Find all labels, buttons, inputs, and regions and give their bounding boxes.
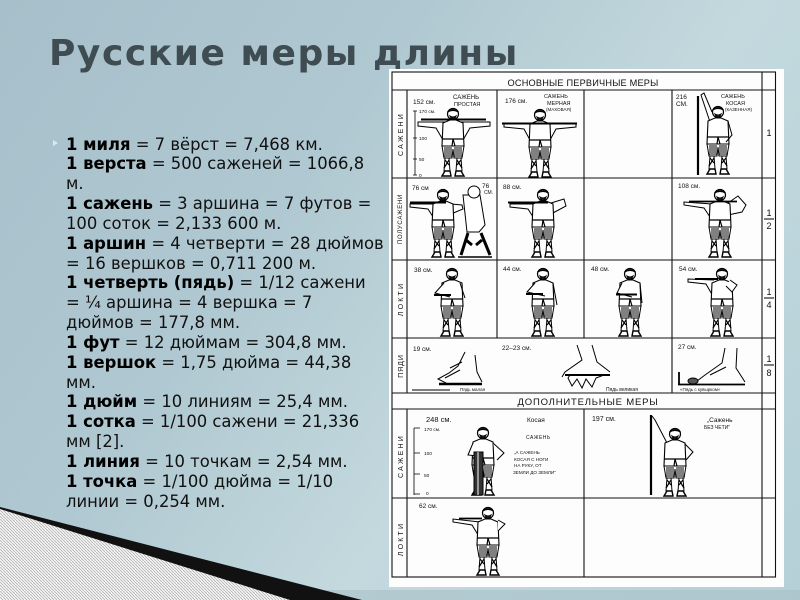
- text block: length equivalences: 1 верста = 500 саженей = 1066,8: [66, 154, 364, 173]
- chart: table of measures: 50: [419, 157, 425, 163]
- height scales: [413, 111, 420, 495]
- figure: half sazhen, oblique: [684, 190, 746, 257]
- text block: length equivalences: 1 точка = 1/100 дюйма = 1/10: [66, 472, 333, 491]
- measure labels: САЖЕНЬ: [453, 95, 479, 101]
- measure labels: СМ.: [484, 190, 493, 196]
- measure labels: 38 см.: [414, 267, 433, 274]
- text block: length equivalences: 1 аршин = 4 четверти = 28 дюймов: [66, 234, 384, 253]
- measure labels: 76: [482, 183, 490, 190]
- figure: half sazhen, front and side: [410, 186, 492, 257]
- measure labels: КОСАЯ: [726, 101, 745, 107]
- chart: table of measures: 100: [424, 451, 432, 457]
- figure: extra elbow: [453, 508, 505, 575]
- additional labels: БЕЗ ЧЕТИ": [704, 425, 730, 431]
- measure labels: Пядь великая: [606, 387, 638, 393]
- fractions column: [764, 128, 774, 378]
- text block: length equivalences: 1 дюйм = 10 линиям = 25,4 мм.: [66, 392, 348, 411]
- fractions column: 8: [766, 368, 772, 378]
- fractions column: 1: [766, 128, 772, 138]
- additional labels: 248 см.: [426, 415, 452, 424]
- additional labels: САЖЕНЬ: [526, 435, 551, 441]
- figure: oblique sazhen with ruler: [468, 428, 504, 495]
- measure labels: 44 см.: [503, 266, 522, 273]
- measure labels: 176 см.: [505, 98, 527, 105]
- text block: length equivalences: мм [2].: [66, 432, 124, 451]
- text block: length equivalences: = ¼ аршина = 4 вершка = 7: [66, 293, 312, 312]
- measure labels: 108 см.: [678, 183, 700, 190]
- measure labels: 152 см.: [413, 99, 435, 106]
- additional labels: „Сажень: [707, 417, 733, 424]
- additional labels: НА РУКУ, ОТ: [514, 463, 542, 468]
- measure labels: (МАХОВАЯ): [546, 107, 572, 112]
- chart: table of measures: 0: [419, 173, 422, 179]
- row labels: [398, 112, 405, 556]
- additional labels: 62 см.: [419, 503, 438, 510]
- text block: length equivalences: 1 четверть (пядь) = 1/12 сажени: [66, 273, 366, 292]
- heading: additional measures: ДОПОЛНИТЕЛЬНЫЕ МЕРЫ: [518, 397, 658, 408]
- measure labels: 76 см: [412, 185, 429, 192]
- fractions column: 1: [766, 354, 772, 364]
- text block: length equivalences: линии = 0,254 мм.: [66, 492, 225, 511]
- figure: oblique sazhen: [698, 93, 732, 175]
- measure labels: 27 см.: [678, 344, 697, 351]
- row labels: САЖЕНИ: [398, 112, 405, 156]
- row labels: ЛОКТИ: [398, 282, 405, 316]
- additional labels: Косая: [527, 417, 545, 424]
- measure labels: Пядь малая: [460, 387, 486, 392]
- measure labels: (КАЗЕННАЯ): [725, 107, 753, 112]
- fractions column: 1: [766, 287, 772, 297]
- measure labels: ПРОСТАЯ: [454, 102, 480, 108]
- measure labels: САЖЕНЬ: [721, 94, 745, 100]
- measure labels: САЖЕНЬ: [544, 94, 568, 100]
- measure labels: МЕРНАЯ: [547, 101, 571, 107]
- text block: length equivalences: 1 сажень = 3 аршина = 7 футов =: [66, 194, 371, 213]
- white chart panel: [389, 69, 784, 587]
- measure labels: СМ.: [676, 101, 688, 108]
- fractions column: 2: [766, 221, 772, 231]
- text block: length equivalences: 100 соток = 2,133 600 м.: [66, 214, 281, 233]
- measure labels: 88 см.: [503, 184, 522, 191]
- text block: length equivalences: [66, 134, 384, 511]
- measure labels: 22–23 см.: [502, 345, 532, 352]
- text block: length equivalences: 1 фут = 12 дюймам = 304,8 мм.: [66, 333, 347, 352]
- heading: primary measures: ОСНОВНЫЕ ПЕРВИЧНЫЕ МЕРЫ: [508, 78, 658, 88]
- icon: span with somersault: [678, 348, 745, 384]
- figure: sazhen without a quarter: [651, 415, 693, 496]
- measure labels: «Пядь с кувырком»: [680, 387, 721, 392]
- figure: measured sazhen: [502, 110, 577, 177]
- row labels: ПОЛУСАЖЕНИ: [398, 194, 404, 244]
- row labels: ЛОКТИ: [398, 522, 405, 556]
- additional labels: „А САЖЕНЬ: [514, 450, 540, 455]
- fractions column: 1: [766, 208, 772, 218]
- chart: table of measures: 100: [419, 136, 427, 142]
- chart: table of measures: 170 см.: [424, 427, 440, 433]
- additional labels: [419, 415, 733, 510]
- additional labels: ЗЕМЛИ ДО ЗЕМЛИ": [513, 470, 556, 475]
- figure: simple sazhen: [418, 108, 490, 176]
- measure labels: 48 см.: [591, 266, 610, 273]
- table grid: [392, 72, 776, 577]
- text block: length equivalences: м.: [66, 174, 84, 193]
- text block: length equivalences: 1 миля = 7 вёрст = 7,468 км.: [66, 134, 323, 154]
- measure labels: [412, 94, 753, 393]
- additional labels: 197 см.: [592, 416, 616, 423]
- title: Русские меры длины: [49, 33, 519, 74]
- figures: elbows row: [434, 268, 465, 336]
- text block: length equivalences: 1 линия = 10 точкам = 2,54 мм.: [66, 452, 348, 471]
- chart: table of measures: 0: [426, 491, 429, 497]
- row labels: САЖЕНИ: [398, 434, 405, 478]
- text block: length equivalences: дюймов = 177,8 мм.: [66, 313, 240, 332]
- icon: small span hand: [412, 352, 482, 390]
- chart: table of measures: 50: [424, 473, 430, 479]
- icon: great span hand: [562, 345, 610, 388]
- row labels: ПЯДИ: [398, 354, 405, 378]
- chart: table of measures: 170 см.: [419, 109, 435, 115]
- measure labels: 19 см.: [413, 346, 432, 353]
- measure labels: 54 см.: [679, 266, 698, 273]
- text block: length equivalences: 1 сотка = 1/100 сажени = 21,336: [66, 412, 359, 431]
- text block: length equivalences: мм.: [66, 373, 96, 392]
- text block: length equivalences: = 16 вершков = 0,711 200 м.: [66, 254, 316, 273]
- fractions column: 4: [766, 300, 772, 310]
- additional labels: КОСАЯ С НОГИ: [514, 457, 548, 462]
- text block: length equivalences: 1 вершок = 1,75 дюйма = 44,38: [66, 353, 351, 372]
- bullet marker: [53, 140, 58, 146]
- figure: half sazhen, measured: [508, 190, 566, 257]
- measure labels: 216: [676, 94, 687, 101]
